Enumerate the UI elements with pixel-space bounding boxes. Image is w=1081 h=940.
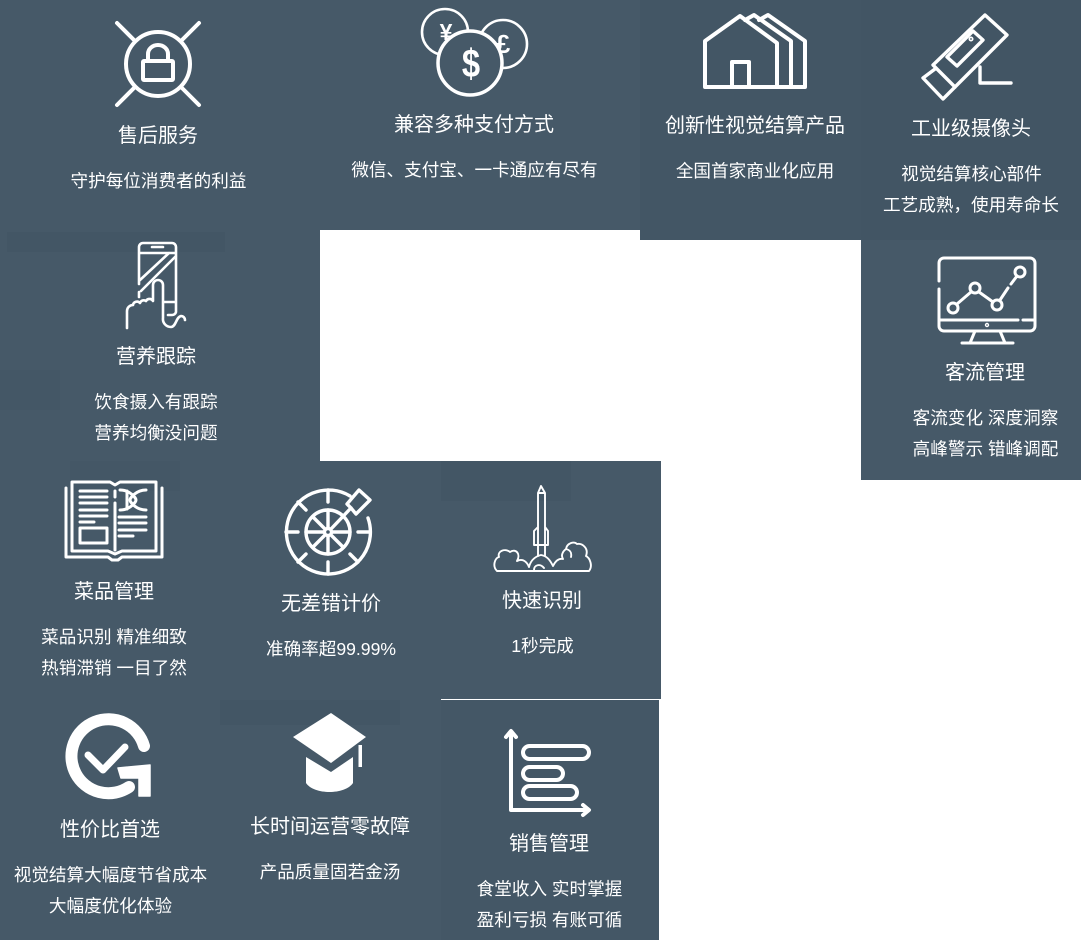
text block: 守护每位消费者的利益 <box>71 171 246 191</box>
icon: lock <box>117 23 199 105</box>
text block: 工艺成熟，使用寿命长 <box>883 195 1059 215</box>
text block: 盈利亏损 有账可循 <box>477 910 622 930</box>
text block: 全国首家商业化应用 <box>676 161 834 181</box>
panel: 客流管理 <box>913 258 1059 459</box>
text block: 营养均衡没问题 <box>94 423 218 443</box>
heading: 客流管理 <box>945 361 1025 384</box>
panel: 性价比首选 <box>14 719 207 916</box>
text block: 微信、支付宝、一卡通应有尽有 <box>351 160 598 180</box>
panel: 快速识别 <box>494 486 591 656</box>
text block: 饮食摄入有跟踪 <box>94 392 218 412</box>
heading: 售后服务 <box>118 124 198 147</box>
icon: coins: ¥ <box>440 19 453 45</box>
heading: 销售管理 <box>509 832 589 855</box>
text block <box>14 865 207 916</box>
text block: 产品质量固若金汤 <box>260 862 400 882</box>
icon: camera <box>923 15 1011 99</box>
icon: coins: £ <box>496 29 511 59</box>
icon: phone touch <box>127 243 185 328</box>
panel: 销售管理 <box>477 731 622 930</box>
icon: houses <box>705 15 805 87</box>
text block <box>883 164 1059 215</box>
panel: 售后服务 <box>71 23 246 191</box>
text block: 1秒完成 <box>511 636 574 656</box>
panel: 无差错计价 <box>266 490 396 659</box>
icon: check refresh <box>71 719 150 796</box>
text block: 大幅度优化体验 <box>49 896 172 916</box>
text block <box>41 627 187 678</box>
heading: 营养跟踪 <box>116 345 196 368</box>
icon: monitor chart <box>939 258 1035 343</box>
heading: 无差错计价 <box>281 592 381 615</box>
icon: open book <box>66 482 162 560</box>
heading: 创新性视觉结算产品 <box>665 114 845 137</box>
icon: target dart <box>286 490 370 574</box>
text block: 视觉结算核心部件 <box>901 164 1042 184</box>
text block: 热销滞销 一目了然 <box>41 658 187 678</box>
text block <box>477 879 622 930</box>
heading: 兼容多种支付方式 <box>394 113 554 136</box>
text block: 高峰警示 错峰调配 <box>913 439 1059 459</box>
panel: 兼容多种支付方式 <box>351 9 598 180</box>
panel: 创新性视觉结算产品 <box>665 15 845 181</box>
icon: coins: $ <box>462 41 480 86</box>
panel: 菜品管理 <box>41 482 187 678</box>
panel: 工业级摄像头 <box>883 15 1059 215</box>
text block: 菜品识别 精准细致 <box>41 627 187 647</box>
icon: rocket <box>494 486 591 571</box>
icon: coins <box>422 9 527 95</box>
heading: 菜品管理 <box>74 580 154 603</box>
text block: 客流变化 深度洞察 <box>913 408 1058 428</box>
heading: 快速识别 <box>502 589 582 612</box>
text block: 食堂收入 实时掌握 <box>477 879 622 899</box>
text block: 准确率超99.99% <box>266 639 396 659</box>
icon: bar chart <box>506 731 589 815</box>
text block <box>94 392 218 443</box>
panel: 营养跟踪 <box>94 243 218 443</box>
heading: 工业级摄像头 <box>911 117 1031 140</box>
heading: 性价比首选 <box>60 818 160 841</box>
icon: graduation cap <box>293 713 366 792</box>
text block: 视觉结算大幅度节省成本 <box>14 865 207 885</box>
panel: 长时间运营零故障 <box>250 713 410 882</box>
heading: 长时间运营零故障 <box>250 815 410 838</box>
text block <box>913 408 1059 459</box>
